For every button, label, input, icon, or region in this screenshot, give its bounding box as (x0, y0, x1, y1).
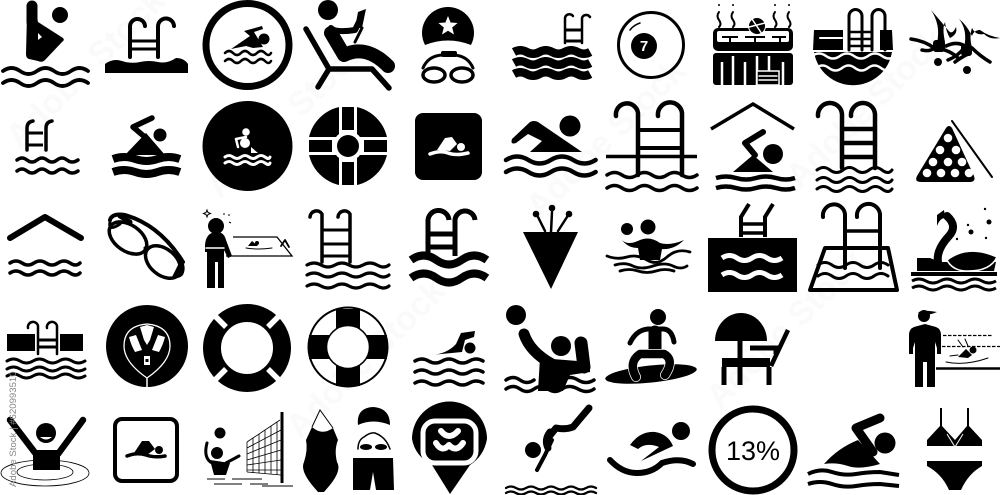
icon: swim cap and goggles (422, 7, 474, 82)
icon: swimmer outlined square (115, 419, 177, 481)
icon grid: Adobe Stock (779, 22, 953, 196)
icon: swimsuit (303, 410, 338, 492)
icon: ladder with trapezoid pool (810, 204, 897, 290)
icon: indoor pool swimmer (711, 104, 795, 190)
icon: large goggles (103, 215, 187, 285)
icon: billiard ball seven (618, 12, 684, 78)
icon: large ladder at deck (606, 102, 697, 190)
icon: thick ladder with thick waves (411, 210, 487, 282)
icon: pool ladder in round badge (812, 10, 910, 85)
icon: pool block with ladder (708, 204, 797, 292)
icon: chevron roof and waves (10, 217, 81, 275)
icon: life ring outlined (308, 308, 388, 386)
icon: swimmer large (506, 116, 596, 176)
icon: swimmer curved wave (610, 422, 693, 473)
icon: water polo small figure (607, 220, 690, 272)
icon: person reading on lounger (306, 0, 389, 88)
icon: water polo in black circle (202, 101, 292, 191)
icon: swimmer big crawl (808, 418, 899, 487)
icon: diver plunging (506, 408, 596, 494)
icon: swan float (911, 208, 997, 290)
icon grid: Adobe Stock (699, 242, 873, 416)
icon: ladder with three waves (817, 103, 892, 192)
icon: life ring quadrant (306, 104, 390, 188)
icon: synchronized swimmers (911, 10, 1000, 74)
icon: hot tub (713, 4, 793, 85)
icon: thirteen percent ring: 13% (726, 436, 780, 466)
icon grid: Adobe Stock (279, 272, 453, 446)
icon: thirteen percent ring (712, 409, 794, 491)
icon: umbrella and beach chair (715, 313, 788, 385)
icon grid: Adobe Stock (199, 32, 373, 206)
icon: neck float with vest (106, 305, 188, 389)
icon: swimmer in circle (206, 4, 289, 86)
icon: billiard rack and cue (916, 121, 992, 182)
icon: swimmer with thick waves (113, 118, 180, 174)
icon: person waving in water (1, 420, 89, 486)
icon grid: Adobe Stock (519, 52, 693, 226)
icon: diver above waves (3, 6, 88, 86)
icon: swimmer with three waves (415, 331, 483, 385)
icon: ladder over three waves (514, 14, 590, 76)
icon: water polo player (506, 305, 594, 392)
icon: small ladder with waves (17, 121, 78, 173)
icon: surfer (604, 309, 698, 387)
watermark id text: Adobe Stock | #620993510 (8, 371, 19, 487)
icon: location pin with waves (412, 402, 487, 494)
icon: life ring segmented (210, 311, 284, 385)
icon: tall ladder with waves (307, 211, 389, 288)
icon: volleyball net (206, 412, 293, 486)
icon: pool ladder on water (105, 18, 188, 73)
icon: fountain cone (523, 205, 578, 289)
icon: swimmer rounded square (415, 113, 482, 180)
icon: bikini (927, 408, 982, 490)
icon: pool deck with ladder and waves (7, 322, 85, 378)
icon: cap goggles and trunks (353, 407, 394, 490)
icon: lifeguard and swimmer (909, 310, 1000, 387)
icon: billiard ball seven: 7 (640, 38, 648, 55)
icon: sick person by pool (204, 210, 292, 288)
